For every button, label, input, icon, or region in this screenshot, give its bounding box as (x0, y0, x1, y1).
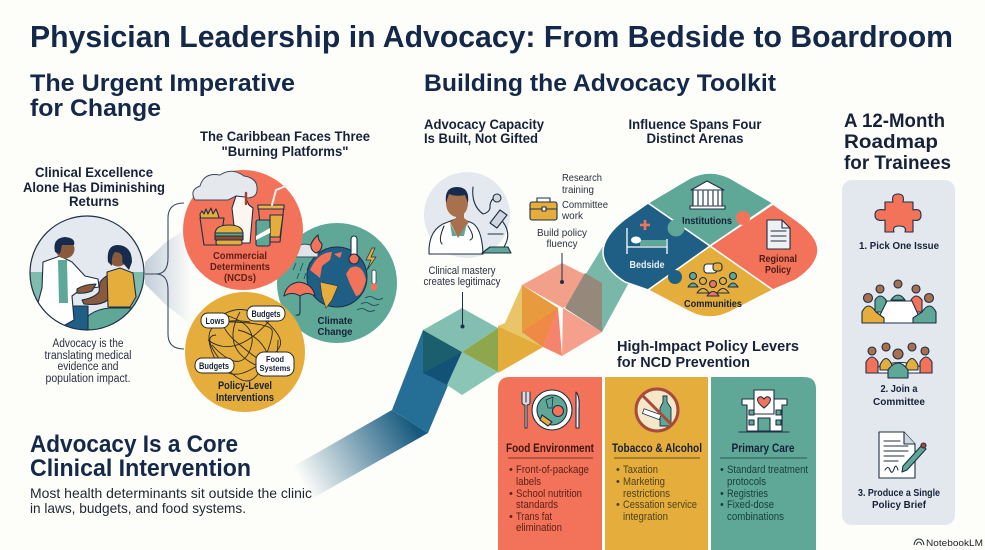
panel: policy-level interventions (185, 292, 305, 412)
label: clinical mastery: Clinical mastery (428, 265, 496, 277)
label: step one: 1. Pick One Issue (859, 240, 939, 252)
label: commercial determinants (210, 250, 270, 284)
label: lows: Lows (206, 316, 224, 326)
heading: clinical excellence: Clinical Excellence (35, 164, 153, 180)
heading: clinical excellence (23, 164, 165, 209)
puzzle piece: communities (648, 246, 773, 317)
label: build policy fluency (537, 227, 588, 250)
icon: doctor circle outline (30, 216, 144, 330)
label: commercial determinants: (NCDs) (224, 272, 256, 284)
icon: small thermometer and waves (357, 270, 383, 312)
text: determinants (30, 485, 312, 516)
icon: umbrella (284, 282, 315, 315)
label: build policy fluency: Build policy (537, 227, 588, 239)
heading: influence arenas (628, 116, 762, 146)
text: advocacy definition (44, 338, 132, 385)
list: tobacco and alcohol: restrictions (623, 488, 670, 500)
icon: globe (307, 247, 367, 308)
heading: urgent imperative: for Change (30, 95, 161, 122)
panel: primary care: Primary Care (732, 443, 794, 455)
icon: policy tangle (208, 309, 281, 381)
panel: tobacco and alcohol: Tobacco & Alcohol (612, 443, 702, 455)
puzzle piece: regional policy: Regional (759, 253, 797, 265)
label: research training (562, 172, 602, 196)
panel: food environment (498, 377, 602, 550)
text: determinants: in laws, budgets, and food systems. (30, 500, 246, 516)
marker: clinical mastery (460, 292, 464, 328)
heading: core clinical intervention: Clinical Intervention (30, 455, 251, 482)
panel: climate change (277, 223, 397, 343)
label: step three: Policy Brief (872, 499, 926, 511)
label: step two: 2. Join a (880, 383, 918, 395)
list: tobacco and alcohol (616, 464, 697, 523)
icon: policy document and pen (879, 432, 926, 478)
label: research training: training (562, 184, 594, 196)
list: food environment: labels (516, 476, 541, 488)
label: policy-level: Policy-Level (218, 380, 272, 392)
label: budgets bottom: Budgets (199, 361, 229, 371)
list: tobacco and alcohol: Marketing (623, 476, 665, 488)
heading: burning platforms (200, 129, 370, 159)
heading: burning platforms: The Caribbean Faces Three (200, 129, 370, 144)
list: food environment: elimination (516, 522, 562, 534)
list: food environment: • (509, 464, 513, 476)
icon: lightning (366, 248, 376, 270)
list: food environment: School nutrition (516, 488, 582, 500)
puzzle piece: regional policy: Policy (765, 264, 791, 276)
panel: food environment: Food Environment (506, 443, 594, 455)
heading: clinical excellence: Alone Has Diminishing (23, 179, 165, 195)
list: food environment: standards (516, 499, 558, 511)
label: commercial determinants: Commercial (213, 250, 267, 262)
text: advocacy definition: evidence and (58, 361, 118, 373)
icon: plate and cutlery (522, 390, 579, 430)
text: advocacy definition: translating medical (44, 350, 132, 362)
list: tobacco and alcohol: Cessation service (623, 499, 697, 511)
heading: roadmap: for Trainees (844, 153, 951, 174)
list: primary care (720, 464, 808, 523)
puzzle piece: regional policy (710, 204, 818, 290)
list: tobacco and alcohol: • (616, 499, 620, 511)
label: climate change: Change (318, 326, 353, 338)
heading: influence arenas: Distinct Arenas (646, 130, 744, 146)
chart: advocacy staircase ribbon (287, 243, 632, 498)
puzzle piece: communities: Communities (684, 298, 742, 310)
icon: briefcase (530, 198, 557, 220)
icon: committee group (866, 343, 932, 378)
heading: clinical excellence: Returns (69, 193, 119, 209)
list: primary care: protocols (727, 476, 766, 488)
panel: commercial determinants (183, 170, 303, 290)
puzzle piece: bedside (603, 203, 710, 290)
icon: fries (200, 208, 224, 245)
icon: burger (215, 225, 243, 245)
icon: hospital (739, 390, 789, 432)
icon: puzzle piece (875, 194, 921, 232)
list: primary care: Standard treatment (727, 464, 808, 476)
puzzle piece: bedside: Bedside (630, 259, 665, 271)
panel: tobacco and alcohol (605, 377, 708, 550)
heading: core clinical intervention (30, 431, 251, 482)
list: tobacco and alcohol: integration (623, 511, 668, 523)
heading: roadmap (844, 111, 951, 174)
label: food systems: Systems (260, 363, 291, 373)
label: committee work (561, 199, 608, 222)
label: climate change: Climate (318, 315, 353, 327)
heading: advocacy capacity: Is Built, Not Gifted (424, 130, 538, 146)
list: primary care: • (720, 464, 724, 476)
heading: urgent imperative: The Urgent Imperative (30, 70, 295, 97)
list: food environment: • (509, 488, 513, 500)
label: clinical mastery: creates legitimacy (424, 276, 501, 288)
heading: roadmap: Roadmap (844, 132, 938, 153)
label: committee work: Committee (562, 199, 608, 211)
list: food environment (509, 464, 589, 534)
label: budgets top: Budgets (252, 309, 280, 319)
list: food environment: Front-of-package (516, 464, 589, 476)
list: primary care: • (720, 488, 724, 500)
icon: can (256, 220, 270, 246)
heading: advocacy toolkit: Building the Advocacy Toolkit (424, 70, 776, 97)
heading: policy levers: High-Impact Policy Levers (617, 338, 799, 355)
list: tobacco and alcohol: • (616, 464, 620, 476)
logo: notebooklm: NotebookLM (926, 538, 983, 549)
icon: doctor and patient (30, 216, 146, 332)
list: primary care: • (720, 499, 724, 511)
connector: bracket to platforms (145, 203, 192, 349)
icon: rain cloud (290, 244, 318, 279)
text: advocacy definition: population impact. (46, 373, 130, 385)
list: primary care: Fixed-dose (727, 499, 774, 511)
icon: flame (311, 235, 322, 253)
list: food environment: • (509, 511, 513, 523)
label: commercial determinants: Determinents (210, 261, 270, 273)
panel: primary care (711, 377, 816, 550)
icon: cloud (193, 171, 257, 200)
heading: roadmap: A 12-Month (844, 111, 945, 132)
diagram: four arenas puzzle (603, 173, 818, 317)
label: step two: Committee (873, 396, 925, 408)
icon: soda cup (258, 186, 286, 242)
label: clinical mastery (424, 265, 501, 288)
text: advocacy definition: Advocacy is the (52, 338, 124, 350)
icon: shake (232, 193, 253, 243)
label: step three (858, 487, 940, 511)
heading: urgent imperative (30, 70, 295, 122)
label: build policy fluency: fluency (546, 238, 578, 250)
heading: burning platforms: "Burning Platforms" (222, 144, 348, 159)
label: step two (873, 383, 925, 408)
icon: doctor with stethoscope (424, 172, 511, 258)
list: primary care: Registries (727, 488, 768, 500)
label: step three: 3. Produce a Single (858, 487, 940, 499)
puzzle piece: institutions: Institutions (682, 215, 732, 227)
label: policy-level (216, 380, 274, 404)
text: determinants: Most health determinants sit outside the clinic (30, 485, 312, 501)
title: Physician Leadership in Advocacy: From Bedside to Boardroom (30, 19, 953, 54)
heading: influence arenas: Influence Spans Four (628, 116, 762, 132)
label: policy-level: Interventions (216, 392, 274, 404)
heading: advocacy capacity: Advocacy Capacity (424, 116, 544, 132)
list: tobacco and alcohol: • (616, 476, 620, 488)
icon: meeting table (862, 280, 936, 323)
panel: roadmap steps (842, 180, 955, 525)
list: food environment: Trans fat (516, 511, 552, 523)
label: food systems (256, 352, 294, 376)
heading: advocacy capacity (424, 116, 544, 146)
list: primary care: combinations (727, 511, 784, 523)
label: climate change (318, 315, 353, 338)
heading: core clinical intervention: Advocacy Is a Core (30, 431, 238, 458)
label: committee work: work (561, 210, 584, 222)
icon: no tobacco or alcohol (636, 389, 678, 431)
puzzle knob: institutions (668, 220, 684, 236)
marker: policy fluency (560, 253, 564, 284)
puzzle piece: institutions (648, 173, 773, 246)
heading: policy levers: for NCD Prevention (617, 354, 750, 371)
list: tobacco and alcohol: Taxation (623, 464, 658, 476)
heading: policy levers (617, 338, 799, 371)
label: research training: Research (562, 172, 602, 184)
icon: thermometer (349, 236, 359, 264)
label: food systems: Food (266, 354, 284, 364)
